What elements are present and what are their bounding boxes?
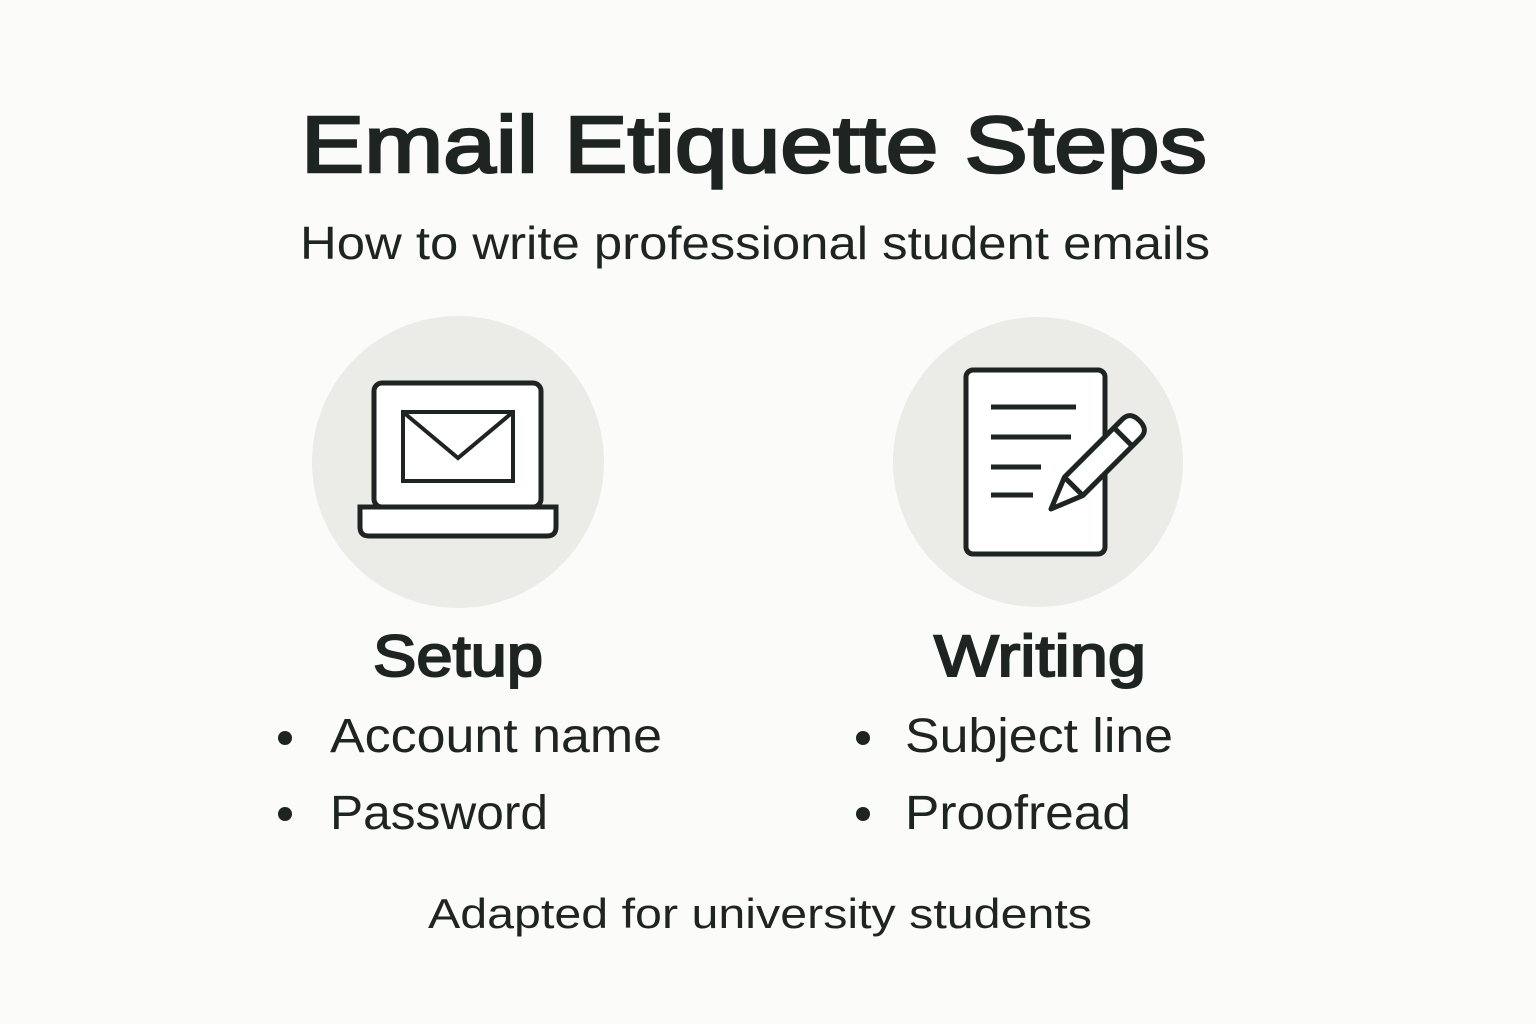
panel: writing [856, 317, 1183, 840]
bullet list: setup: Password [330, 787, 548, 840]
bullet list: writing: Subject line [905, 710, 1173, 763]
panel: setup [278, 316, 662, 840]
bullet list: writing [856, 710, 1173, 840]
heading: writing: Writing [934, 624, 1146, 689]
subtitle: How to write professional student emails [300, 217, 1210, 269]
icon: laptop with envelope [312, 316, 604, 608]
heading: setup: Setup [373, 624, 543, 689]
bullet list: setup [278, 710, 662, 840]
footer note: Adapted for university students [428, 890, 1092, 937]
bullet list: writing: Proofread [905, 787, 1131, 840]
icon: document with pencil [893, 317, 1183, 607]
title: Email Etiquette Steps [301, 100, 1207, 189]
bullet list: setup: Account name [330, 710, 662, 763]
